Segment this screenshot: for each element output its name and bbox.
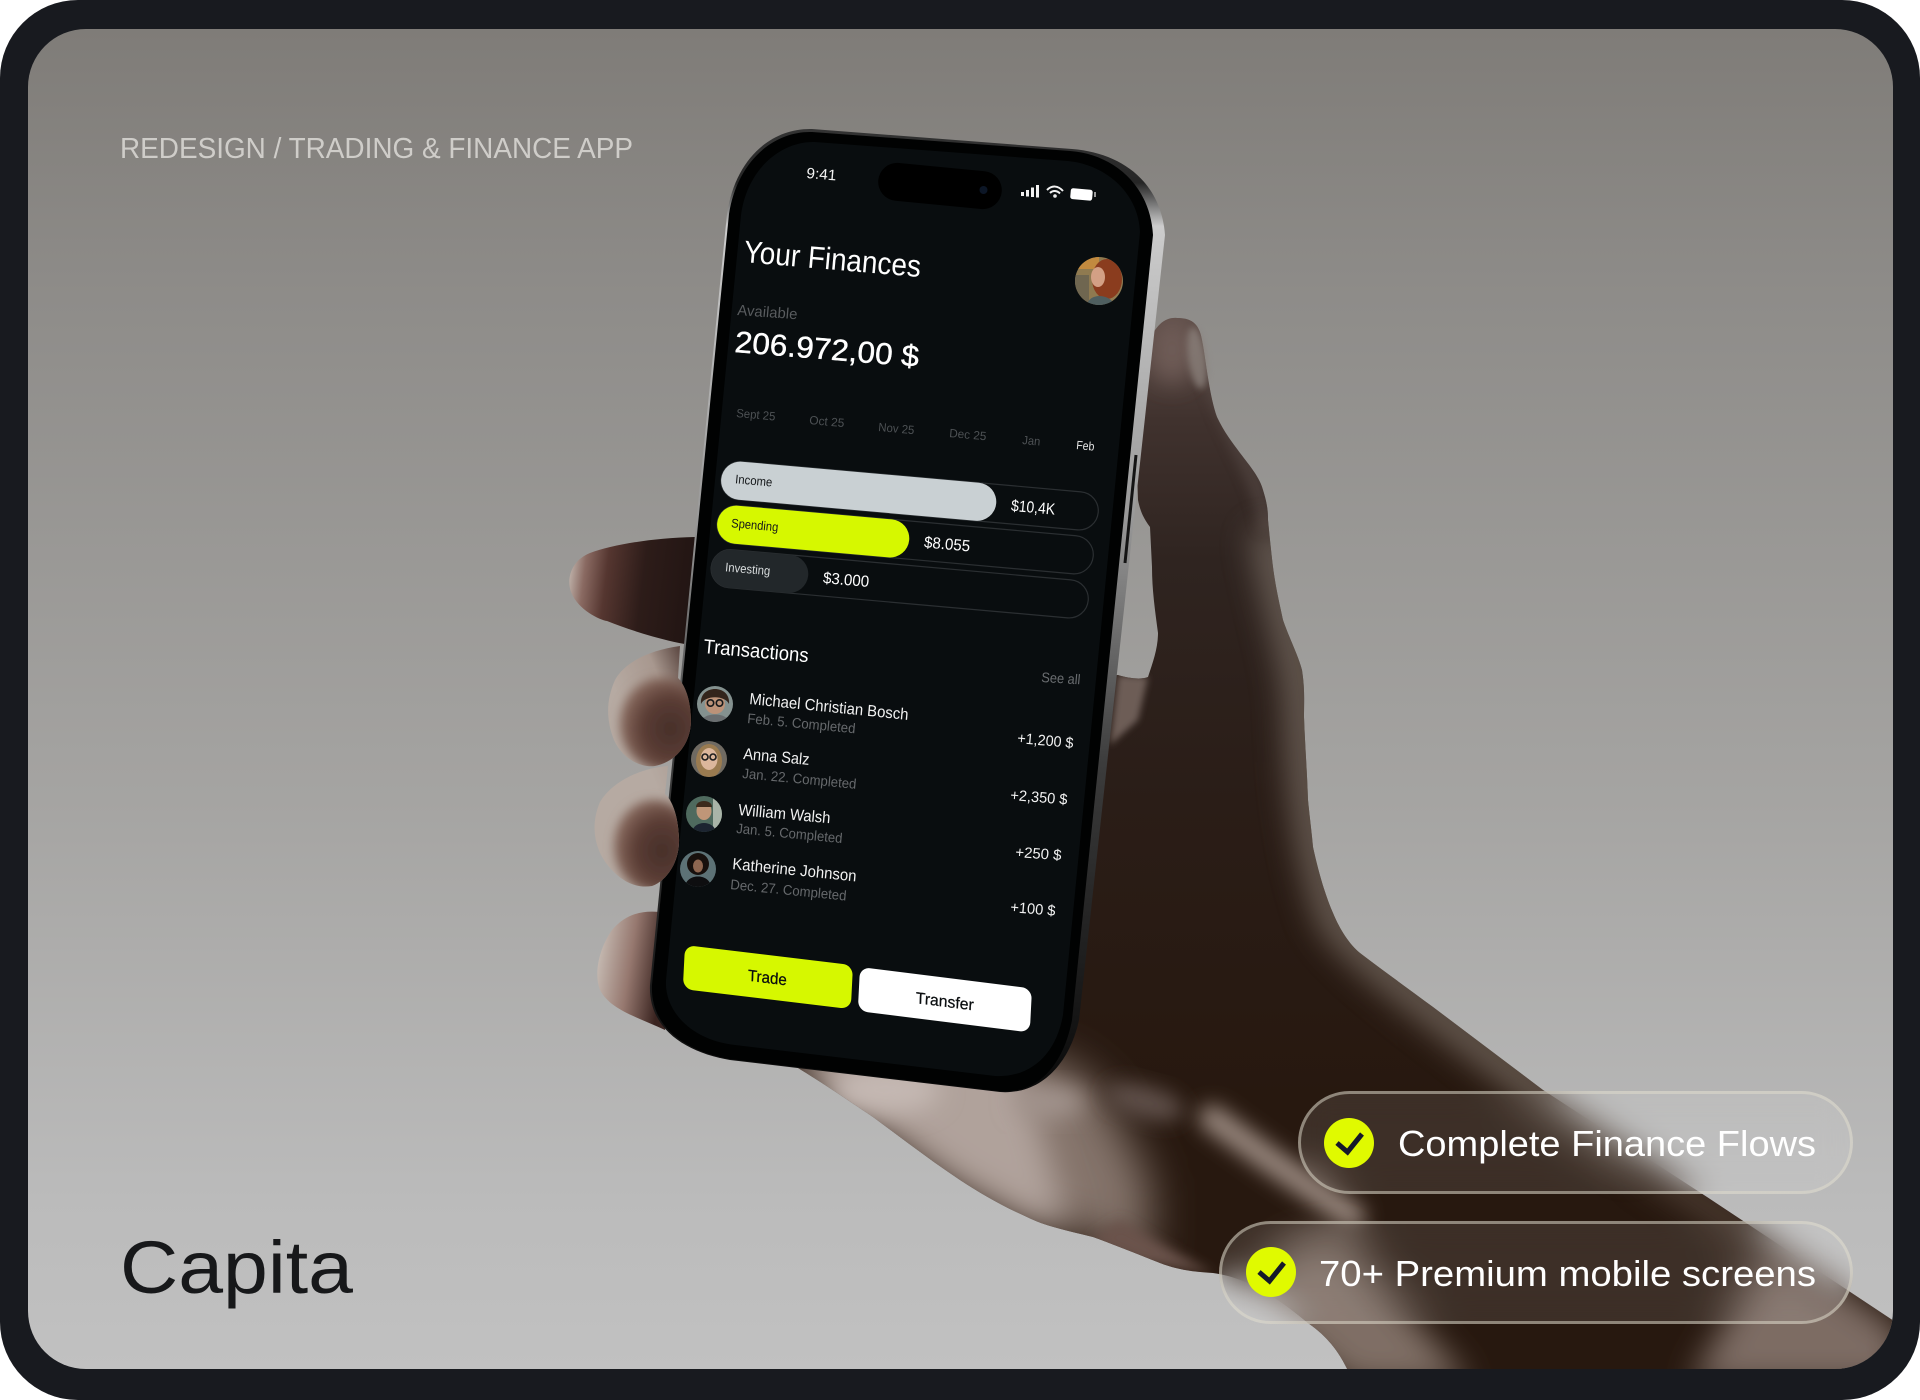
month: dec: Dec 25 <box>949 426 987 443</box>
badge: premium mobile screens: 70+ Premium mobile screens <box>1319 1253 1816 1294</box>
income bar: $10,4K <box>1010 497 1056 519</box>
badge: complete finance flows <box>1298 1091 1853 1194</box>
index finger <box>569 537 695 645</box>
transaction: william: William Walsh <box>738 801 831 827</box>
transaction list <box>680 686 1075 920</box>
signal icon <box>1021 185 1039 198</box>
middle finger over phone <box>608 646 691 766</box>
transaction: katherine: Dec. 27. Completed <box>730 876 847 904</box>
transaction: katherine: +100 $ <box>1010 899 1057 920</box>
profile avatar <box>1075 257 1123 305</box>
transaction: william: +250 $ <box>1015 844 1063 864</box>
month: oct: Oct 25 <box>809 413 845 430</box>
available balance: 206.972,00 $ <box>733 326 921 374</box>
battery icon <box>1070 188 1096 201</box>
month: sept: Sept 25 <box>736 406 776 424</box>
little finger <box>597 912 665 1030</box>
month: jan: Jan <box>1022 433 1041 449</box>
hand holding phone <box>569 300 1920 1400</box>
transaction: anna: Anna Salz <box>743 745 810 769</box>
spending bar: Spending <box>731 516 779 534</box>
transaction: michael: +1,200 $ <box>1017 730 1075 752</box>
investing bar <box>709 548 1090 620</box>
investing bar: $3.000 <box>822 569 870 591</box>
transaction: william: Jan. 5. Completed <box>736 820 843 846</box>
month: feb: Feb <box>1076 438 1095 454</box>
heading: transactions: Transactions <box>703 636 810 667</box>
side button <box>1125 455 1136 563</box>
bar chart <box>709 460 1100 620</box>
button: trade <box>683 945 853 1009</box>
button: transfer: Transfer <box>915 989 975 1014</box>
hand and arm silhouette <box>798 318 1892 1369</box>
investing bar: Investing <box>725 560 771 578</box>
brand logo text: Capita <box>120 1226 354 1309</box>
button: transfer <box>858 967 1032 1032</box>
transaction: michael: Feb. 5. Completed <box>747 710 856 736</box>
transaction: michael <box>697 686 1075 752</box>
spending bar: $8.055 <box>923 533 971 556</box>
heading: your finances: Your Finances <box>742 234 923 284</box>
transaction: michael: Michael Christian Bosch <box>749 690 909 724</box>
transaction: anna: +2,350 $ <box>1010 787 1069 809</box>
wifi icon <box>1047 187 1063 197</box>
phone <box>650 129 1165 1092</box>
transaction: katherine: Katherine Johnson <box>732 855 857 885</box>
transaction: anna: Jan. 22. Completed <box>742 765 857 792</box>
camera lens <box>980 186 988 194</box>
phone screen <box>666 142 1140 1076</box>
badge: complete finance flows: Complete Finance Flows <box>1398 1123 1816 1164</box>
month selector <box>736 406 1095 454</box>
button: trade: Trade <box>747 967 787 989</box>
badge: premium mobile screens <box>1219 1221 1853 1324</box>
transaction: william <box>686 796 1063 864</box>
status bar <box>806 161 1096 211</box>
thumb nail <box>1184 326 1210 390</box>
label: available: Available <box>737 302 798 323</box>
income bar <box>719 460 1100 532</box>
spending bar <box>715 504 1095 575</box>
time: 9:41 <box>806 165 837 184</box>
black bezel <box>652 132 1153 1091</box>
link: see all: See all <box>1041 669 1081 687</box>
transaction: katherine <box>680 851 1057 920</box>
ring finger over phone <box>594 766 680 886</box>
dynamic island <box>876 161 1004 211</box>
transaction: anna <box>691 741 1069 809</box>
title: project label: REDESIGN / TRADING & FINANCE APP <box>120 133 633 165</box>
month: nov: Nov 25 <box>878 420 915 437</box>
phone body with metal rim <box>650 129 1165 1092</box>
income bar: Income <box>735 472 773 490</box>
